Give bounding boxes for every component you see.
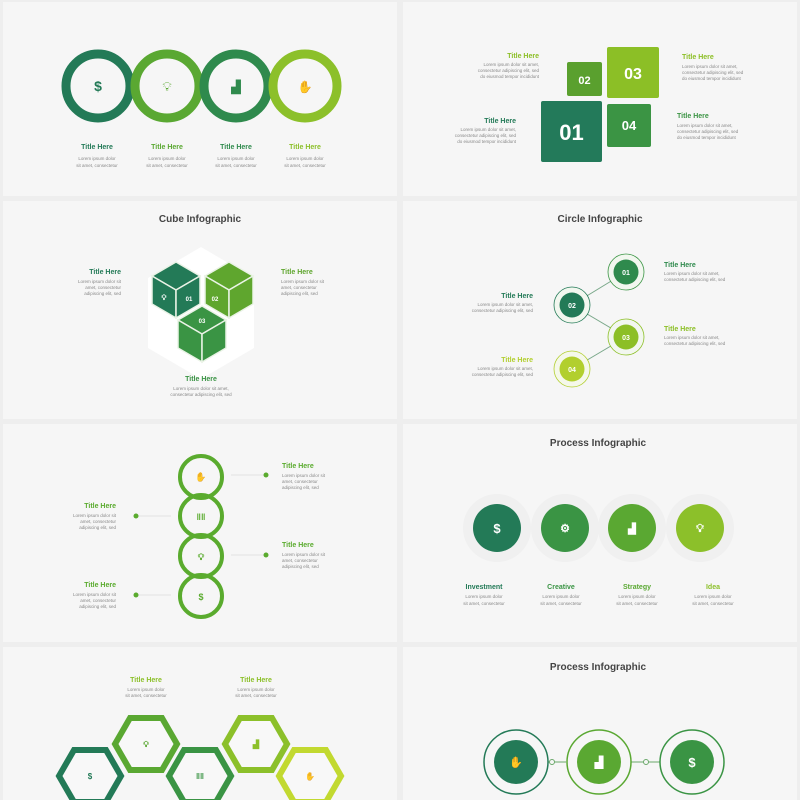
circle texts: consectetur adipiscing elit, sed: [472, 308, 533, 313]
process circles: [473, 504, 724, 552]
panel: numbered squares: [455, 47, 744, 162]
square 02: 02: [578, 75, 591, 87]
circle 04: 04: [568, 367, 576, 374]
heading: Process Infographic: [550, 662, 647, 673]
square 01: [541, 101, 602, 162]
circle texts: Title Here: [664, 262, 696, 269]
circle: money: [660, 730, 724, 794]
circle 01: 01: [622, 270, 630, 277]
chain icons: 💡︎: [198, 552, 205, 562]
circle 02: 02: [568, 303, 576, 310]
process labels: Idea: [706, 584, 720, 591]
panel: process infographic (4 circles): [463, 438, 734, 606]
labels: Lorem ipsum dolor: [217, 156, 255, 161]
heading: Process Infographic: [550, 438, 647, 449]
chain icons: $: [198, 592, 204, 602]
circle: chart: [567, 730, 631, 794]
text blocks: Lorem ipsum dolor sit amet,: [483, 62, 539, 67]
chain texts: amet, consectetur: [80, 598, 116, 603]
cube 03: [178, 306, 226, 362]
circle texts: Title Here: [501, 357, 533, 364]
ring 2: 💡︎: [162, 79, 172, 94]
hex texts: Lorem ipsum dolor: [237, 687, 275, 692]
cube 02: 02: [212, 297, 219, 303]
chain texts: adipiscing elit, sed: [282, 485, 319, 490]
cube texts: Lorem ipsum dolor sit: [78, 279, 122, 284]
chain texts: Lorem ipsum dolor sit: [282, 552, 326, 557]
labels: Lorem ipsum dolor: [148, 156, 186, 161]
text blocks: consectetur adipiscing elit, sed: [682, 70, 744, 75]
text blocks: do eiusmod tempor incididunt: [480, 74, 540, 79]
cube texts: Title Here: [185, 376, 217, 383]
circle texts: consectetur adipiscing elit, sed: [664, 341, 726, 346]
hex icons: $: [88, 772, 93, 781]
circle: chart: ▟: [594, 755, 604, 769]
text blocks: consectetur adipiscing elit, sed: [677, 129, 739, 134]
square 04: 04: [622, 118, 637, 133]
process labels: Creative: [547, 584, 575, 591]
labels: sit amet, consectetur: [284, 163, 326, 168]
circle: money: $: [688, 755, 696, 770]
cube texts: amet, consectetur: [281, 285, 317, 290]
labels: Lorem ipsum dolor: [286, 156, 324, 161]
chain texts: Title Here: [282, 542, 314, 549]
circle texts: [472, 262, 726, 377]
square 03: 03: [624, 66, 642, 83]
chain texts: adipiscing elit, sed: [79, 525, 116, 530]
text blocks: do eiusmod tempor incididunt: [457, 139, 517, 144]
circle: handshake: [484, 730, 548, 794]
ring 4: [273, 54, 337, 118]
panel: hexagons: [59, 677, 341, 800]
square 04: [607, 104, 651, 147]
hex icons: ǁǁ: [196, 772, 204, 781]
ring 3: ▟: [230, 79, 241, 95]
hex texts: sit amet, consectetur: [125, 693, 167, 698]
white hexagon backdrop: [148, 247, 254, 379]
ring 3: [204, 54, 268, 118]
text blocks: do eiusmod tempor incididunt: [682, 76, 742, 81]
heading: Circle Infographic: [557, 214, 643, 225]
cube 03: 03: [199, 319, 206, 325]
ring 1: [66, 54, 130, 118]
halos: [463, 494, 734, 562]
hex texts: [125, 677, 277, 698]
cube texts: Lorem ipsum dolor sit: [281, 279, 325, 284]
cube 01: 💡︎: [162, 295, 167, 302]
process labels: Lorem ipsum dolor: [618, 594, 656, 599]
chain texts: amet, consectetur: [282, 558, 318, 563]
chain icons: [195, 471, 207, 602]
text blocks: Title Here: [484, 118, 516, 125]
chain texts: adipiscing elit, sed: [79, 604, 116, 609]
square 02: [567, 62, 602, 96]
hex texts: sit amet, consectetur: [235, 693, 277, 698]
chain texts: [73, 463, 326, 609]
process circles: $: [493, 521, 501, 536]
hex icons: ▟: [252, 739, 260, 750]
ring 2: [135, 54, 199, 118]
connectors: [548, 760, 660, 764]
cube 01: [152, 262, 200, 318]
process labels: sit amet, consectetur: [692, 601, 734, 606]
chain texts: amet, consectetur: [80, 519, 116, 524]
circle 03: 03: [622, 335, 630, 342]
process circles: ⚙: [560, 523, 570, 535]
labels: sit amet, consectetur: [146, 163, 188, 168]
panel: process infographic (3 circles): [484, 662, 724, 794]
process labels: Investment: [466, 584, 503, 591]
text blocks: Title Here: [682, 54, 714, 61]
cube texts: adipiscing elit, sed: [84, 291, 121, 296]
text blocks: Title Here: [507, 53, 539, 60]
process circles: 💡︎: [696, 522, 704, 535]
text blocks: do eiusmod tempor incididunt: [677, 135, 737, 140]
process labels: [463, 584, 734, 606]
circle 02: [554, 287, 590, 323]
text blocks: [455, 53, 744, 144]
text blocks: consectetur adipiscing elit, sed: [455, 133, 516, 138]
hex texts: Lorem ipsum dolor: [127, 687, 165, 692]
labels: sit amet, consectetur: [215, 163, 257, 168]
panel: linked rings: [66, 54, 337, 168]
circle: handshake: ✋: [509, 756, 523, 769]
cube 02: [205, 262, 253, 318]
labels: Title Here: [151, 144, 183, 151]
cube texts: [78, 269, 325, 397]
cube 01: 01: [186, 297, 193, 303]
panel: circle infographic: [472, 214, 726, 387]
ring 1: $: [94, 78, 102, 94]
chain texts: adipiscing elit, sed: [282, 564, 319, 569]
hex icons: [88, 739, 315, 781]
cube texts: Title Here: [89, 269, 121, 276]
ring 4: ✋: [298, 80, 312, 94]
circle 01: [608, 254, 644, 290]
leader lines and dots: [134, 472, 268, 598]
text blocks: consectetur adipiscing elit, sed: [478, 68, 539, 73]
process circles: ▟: [627, 522, 636, 535]
heading: Cube Infographic: [159, 214, 242, 225]
chain icons: ǁǁ: [197, 512, 205, 522]
hex icons: ✋: [305, 771, 315, 781]
circle 03: [608, 319, 644, 355]
circle texts: Lorem ipsum dolor sit amet,: [664, 335, 720, 340]
labels: Title Here: [289, 144, 321, 151]
process labels: Lorem ipsum dolor: [694, 594, 732, 599]
labels: Lorem ipsum dolor: [78, 156, 116, 161]
hexagon shapes: [59, 718, 341, 800]
text blocks: Lorem ipsum dolor sit amet,: [677, 123, 733, 128]
square 03: [607, 47, 659, 98]
chain texts: Title Here: [84, 503, 116, 510]
cube texts: Title Here: [281, 269, 313, 276]
chain texts: Title Here: [282, 463, 314, 470]
circle texts: Title Here: [664, 326, 696, 333]
process labels: Lorem ipsum dolor: [542, 594, 580, 599]
circle texts: Lorem ipsum dolor sit amet,: [664, 271, 720, 276]
labels: Title Here: [220, 144, 252, 151]
process labels: Lorem ipsum dolor: [465, 594, 503, 599]
circle texts: Title Here: [501, 293, 533, 300]
process labels: Strategy: [623, 584, 651, 591]
cube texts: amet, consectetur: [85, 285, 121, 290]
cube texts: Lorem ipsum dolor sit amet,: [173, 386, 229, 391]
square 01: 01: [559, 120, 584, 145]
text blocks: Title Here: [677, 113, 709, 120]
labels: Title Here: [81, 144, 113, 151]
chain texts: Title Here: [84, 582, 116, 589]
circle texts: Lorem ipsum dolor sit amet,: [477, 366, 533, 371]
connectors: [572, 272, 626, 369]
cube texts: consectetur adipiscing elit, sed: [170, 392, 232, 397]
hex texts: Title Here: [130, 677, 162, 684]
cube texts: adipiscing elit, sed: [281, 291, 318, 296]
circle texts: consectetur adipiscing elit, sed: [472, 372, 533, 377]
chain texts: Lorem ipsum dolor sit: [73, 592, 117, 597]
labels: sit amet, consectetur: [76, 163, 118, 168]
panel: vertical chain: [73, 456, 326, 617]
chain texts: Lorem ipsum dolor sit: [73, 513, 117, 518]
process labels: sit amet, consectetur: [540, 601, 582, 606]
text blocks: Lorem ipsum dolor sit amet,: [460, 127, 516, 132]
chain icons: ✋: [195, 471, 207, 482]
hex texts: Title Here: [240, 677, 272, 684]
hex icons: 💡︎: [142, 739, 149, 749]
chain rings: [180, 456, 222, 617]
circle texts: Lorem ipsum dolor sit amet,: [477, 302, 533, 307]
process labels: sit amet, consectetur: [616, 601, 658, 606]
circle texts: consectetur adipiscing elit, sed: [664, 277, 726, 282]
text blocks: Lorem ipsum dolor sit amet,: [682, 64, 738, 69]
labels: [76, 144, 326, 168]
circle 04: [554, 351, 590, 387]
chain texts: Lorem ipsum dolor sit: [282, 473, 326, 478]
panel: cube infographic: [78, 214, 325, 397]
process labels: sit amet, consectetur: [463, 601, 505, 606]
chain texts: amet, consectetur: [282, 479, 318, 484]
